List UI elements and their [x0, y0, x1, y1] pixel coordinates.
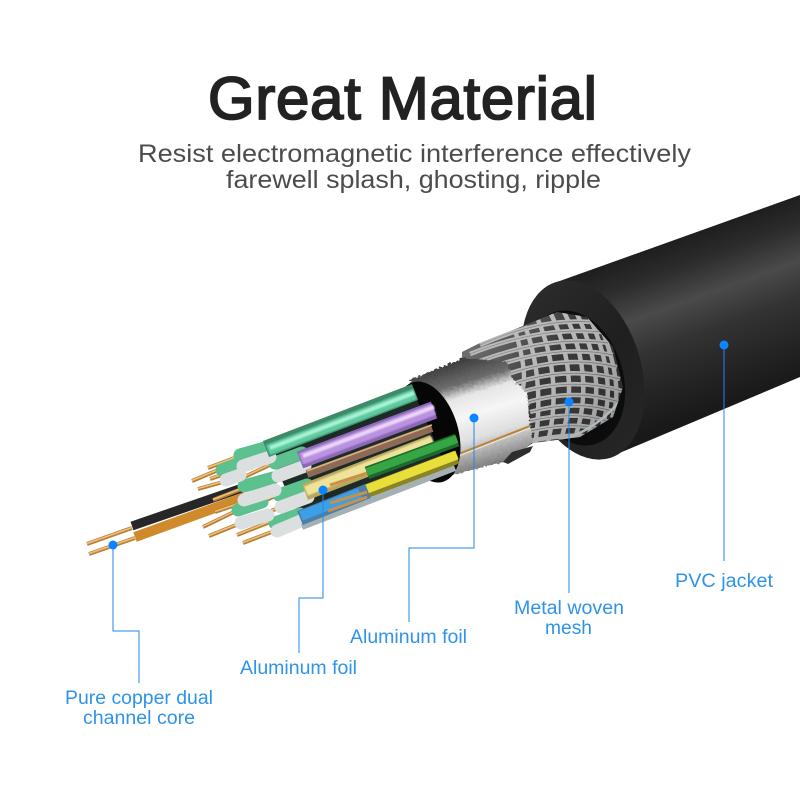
leader: outer aluminum foil — [409, 414, 478, 622]
yellow wire — [367, 455, 457, 491]
gold wire — [305, 441, 433, 492]
leader: inner aluminum foil — [299, 486, 328, 653]
label: metal woven mesh — [514, 598, 624, 639]
copper conductors — [192, 456, 281, 543]
foil-wrapped colored pairs — [266, 392, 457, 527]
leader: PVC jacket — [720, 340, 728, 561]
green wire — [266, 392, 415, 450]
gray foil wire — [302, 468, 455, 527]
leader: metal mesh — [564, 398, 574, 593]
black and orange drain wires — [87, 487, 245, 554]
cable opening — [384, 374, 472, 490]
leader: pure copper core — [108, 540, 139, 683]
label: metal woven mesh: mesh — [545, 618, 592, 639]
blue wire — [300, 491, 368, 518]
green and white insulated sleeves — [222, 447, 308, 531]
label: pure copper dual channel core — [65, 688, 213, 729]
dark filler behind conductors — [268, 395, 445, 518]
label: pure copper dual channel core: Pure copper dual — [65, 688, 213, 709]
stripped copper inside bundle — [328, 473, 367, 511]
label: metal woven mesh: Metal woven — [514, 598, 624, 619]
label: aluminum foil inner: Aluminum foil — [240, 658, 357, 679]
aluminum foil shield tube — [410, 358, 533, 481]
label: PVC jacket: PVC jacket — [675, 571, 774, 592]
tan strands — [307, 428, 432, 474]
metal woven mesh — [462, 312, 623, 466]
dark green wire — [367, 439, 457, 473]
subtitle: farewell splash, ghosting, ripple — [226, 166, 601, 194]
infographic canvas — [66, 74, 800, 724]
title: Great Material — [208, 65, 597, 132]
purple wire — [300, 407, 434, 460]
label: aluminum foil outer: Aluminum foil — [350, 627, 467, 648]
label: pure copper dual channel core: channel core — [83, 708, 195, 729]
subtitle — [138, 140, 692, 194]
PVC jacket cable sheath — [501, 195, 800, 475]
subtitle: Resist electromagnetic interference effectively — [138, 140, 692, 168]
